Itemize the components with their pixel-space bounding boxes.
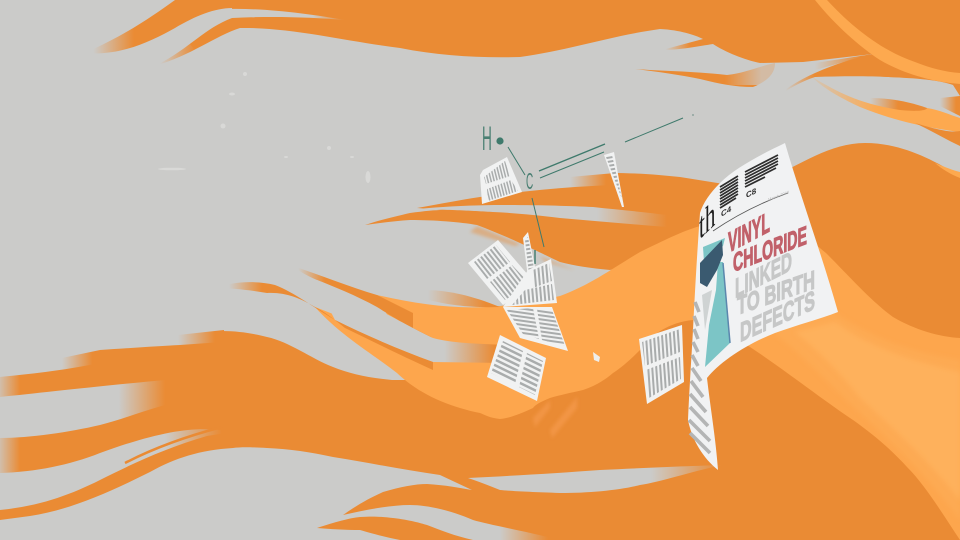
gray notch <box>0 380 165 438</box>
small paper 1 <box>480 157 522 204</box>
small paper 7 <box>487 335 546 401</box>
lower left orange wave <box>0 290 960 540</box>
small paper 4 <box>523 232 537 278</box>
atom H: H <box>482 118 492 158</box>
folded column stripes <box>689 302 710 453</box>
small paper 5 <box>503 259 557 307</box>
headline gray <box>735 246 815 348</box>
masthead: th <box>699 192 715 249</box>
bonds <box>508 118 683 247</box>
small paper 8 <box>639 325 684 404</box>
orange tail strip <box>635 63 777 87</box>
second ribbon right <box>812 77 960 178</box>
small paper 2 <box>604 152 624 207</box>
atom dot <box>496 137 504 145</box>
molecule diagram <box>482 114 694 264</box>
small paper 6 <box>503 307 568 351</box>
bottom strip <box>317 517 473 540</box>
lower orange strip <box>215 278 433 370</box>
date: March 2008 <box>768 189 790 202</box>
headline red: CHLORIDE <box>733 220 807 278</box>
atom C: C <box>526 168 533 194</box>
headline gray: TO BIRTH <box>737 265 815 321</box>
headline red: VINYL <box>728 205 770 260</box>
teaser block two <box>745 155 778 200</box>
gray wedge <box>317 280 510 363</box>
masthead rule <box>713 193 788 231</box>
headline red <box>728 205 807 278</box>
headline gray: LINKED <box>735 246 792 305</box>
headline gray: DEFECTS <box>740 284 815 348</box>
light orange ribbon <box>315 214 960 540</box>
large newspaper <box>688 143 838 470</box>
illustration <box>700 238 730 367</box>
top orange wave <box>76 0 960 100</box>
upper orange strip over ribbon <box>287 262 433 338</box>
small paper 3 <box>468 240 535 305</box>
right orange mass <box>700 143 960 345</box>
page <box>688 143 838 470</box>
dust specks <box>158 72 370 183</box>
teaser block one <box>720 176 738 219</box>
teaser block two: C8 <box>746 185 757 200</box>
light ribbon top right <box>815 0 960 84</box>
gray tongue <box>468 465 722 493</box>
ribbon streaks <box>533 400 550 427</box>
middle orange band <box>365 173 730 270</box>
orange fragment near ribbon top <box>428 290 500 307</box>
paper scrap <box>593 352 600 362</box>
teaser block one: C4 <box>721 204 731 219</box>
